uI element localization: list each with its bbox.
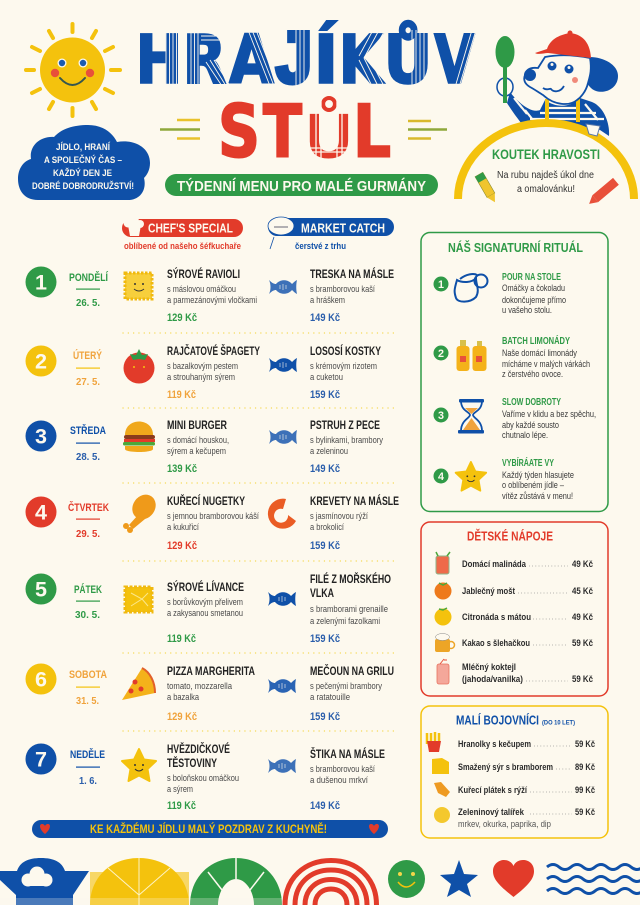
fish dish <box>310 268 394 324</box>
day badge 2 <box>26 346 56 376</box>
day badge 3: 3 <box>35 426 47 448</box>
step 2: mícháme v malých várkách <box>502 359 590 369</box>
day label <box>69 669 107 707</box>
day badge 5 <box>26 574 56 604</box>
drink item <box>462 638 593 649</box>
day badge 3 <box>26 420 56 452</box>
drink item: Kakao s šlehačkou <box>462 638 530 649</box>
title: Stůl: T <box>263 90 302 174</box>
icon: heart right <box>369 824 379 834</box>
dish: tomato, mozzarella <box>167 681 232 691</box>
icon: heart left <box>40 824 50 834</box>
title: Hrajíkův: J <box>276 18 312 98</box>
step 1 <box>434 272 566 315</box>
fish dish: 149 Kč <box>310 463 340 475</box>
day label: 31. 5. <box>76 695 99 707</box>
dish: 129 Kč <box>167 540 197 552</box>
day badge 4: 4 <box>35 502 47 524</box>
row: Pondělí <box>26 266 394 324</box>
step 1: Omáčky a čokoladu <box>502 283 565 293</box>
title: Hrajíkův: R <box>183 22 226 98</box>
cloud callout: KAŽDÝ DEN JE <box>53 167 112 179</box>
icon: lemon <box>434 608 452 626</box>
day label: 28. 5. <box>76 451 100 463</box>
title: Stůl: L <box>353 90 391 174</box>
kids item: Smažený sýr s bramborem <box>458 762 553 773</box>
day badge 6 <box>26 664 56 694</box>
bottom decor: rainbow <box>285 860 376 905</box>
drink item: Citronáda s mátou <box>462 612 531 623</box>
panel: Koutek hravosti: a omalovánku! <box>517 184 575 195</box>
title: Hrajíkův <box>136 18 474 98</box>
icon: raspberry drink <box>436 552 450 574</box>
column header: chef's special <box>122 216 243 251</box>
bottom fade strip <box>0 898 282 905</box>
dish: RAJČATOVÉ ŠPAGETY <box>167 345 260 358</box>
dish <box>167 495 259 552</box>
title: Hrajíkův: V <box>434 22 474 98</box>
day label: 1. 6. <box>79 775 97 787</box>
panel: Koutek hravosti: KOUTEK HRAVOSTI <box>492 147 600 162</box>
kids item: 99 Kč <box>575 785 595 796</box>
dish: a parmezánovými vločkami <box>167 295 257 305</box>
column header: chef's special: CHEF'S SPECIAL <box>148 222 233 236</box>
drink item <box>462 612 593 623</box>
column header: market catch <box>268 217 394 251</box>
shrimp dish: 159 Kč <box>310 540 340 552</box>
step 3: 3 <box>438 410 444 422</box>
fish dish: a hráškem <box>310 295 345 305</box>
day badge 1: 1 <box>35 272 47 294</box>
step 1: 1 <box>438 279 444 291</box>
cloud callout: DOBRÉ DOBRODRUŽSTVÍ! <box>32 180 134 192</box>
step 1: dokončujeme přímo <box>502 295 566 305</box>
icon: tomato <box>124 349 154 384</box>
step 4: Každý týden hlasujete <box>502 470 574 480</box>
icon: fish <box>268 759 296 773</box>
fish dish: PSTRUH Z PECE <box>310 420 380 432</box>
day badge 2: 2 <box>35 350 47 374</box>
drink item: (jahoda/vanilka) <box>462 674 523 685</box>
fish dish: a zelenými fazolkami <box>310 616 380 626</box>
icon: bottles <box>456 340 486 371</box>
icon: shrimp <box>268 499 296 529</box>
day label: SOBOTA <box>69 669 107 681</box>
icon: star <box>122 749 156 781</box>
step 3: SLOW DOBROTY <box>502 397 561 408</box>
banner: KE KAŽDÉMU JÍDLU MALÝ POZDRAV Z KUCHYNĚ! <box>90 823 327 836</box>
dish: KUŘECÍ NUGETKY <box>167 495 245 508</box>
drink item: 45 Kč <box>572 586 593 597</box>
step 4: 4 <box>438 471 445 483</box>
dish: SÝROVÉ RAVIOLI <box>167 268 240 281</box>
icon: star <box>456 462 486 491</box>
dish: s boloňskou omáčkou <box>167 773 239 783</box>
dish: PIZZA MARGHERITA <box>167 666 255 678</box>
fish dish: s bramborovou kaší <box>310 764 375 774</box>
step 4: o oblíbeném jídle – <box>502 480 564 490</box>
step 3 <box>434 397 596 440</box>
kids item: 59 Kč <box>575 807 595 818</box>
shrimp dish <box>310 495 399 552</box>
drink item <box>462 662 593 685</box>
day badge 5: 5 <box>35 578 47 602</box>
fish dish: s bramborami grenaille <box>310 604 388 614</box>
icon: dog with spoon <box>496 30 618 136</box>
step 1: POUR NA STOLE <box>502 272 561 283</box>
day label: ČTVRTEK <box>68 501 109 514</box>
icon: chicken strip <box>434 782 450 797</box>
fish dish: s krémovým rizotem <box>310 361 377 371</box>
step 3: aby každé sousto <box>502 420 559 430</box>
kids item: Hranolky s kečupem <box>458 739 531 750</box>
cloud callout <box>18 125 150 200</box>
dish: SÝROVÉ LÍVANCE <box>167 581 244 594</box>
icon: pizza <box>122 668 155 700</box>
day label <box>68 501 109 540</box>
icon: pancake <box>125 587 152 612</box>
title: Stůl: S <box>218 90 260 174</box>
icon: hourglass <box>458 399 484 434</box>
panel: kids menu <box>421 706 608 838</box>
kids item: Zeleninový talířek <box>458 807 525 818</box>
day badge 6: 6 <box>35 668 47 692</box>
day badge 1 <box>26 266 56 298</box>
bottom decor: heart <box>493 860 534 897</box>
day label: STŘEDA <box>70 424 106 437</box>
fish dish: 159 Kč <box>310 389 340 401</box>
cloud callout: A SPOLEČNÝ ČAS – <box>44 154 122 166</box>
step 4: VYBÍRÁATE VY <box>502 456 554 469</box>
day label: 27. 5. <box>76 376 100 388</box>
icon: fries <box>427 732 441 752</box>
dish: HVĚZDIČKOVÉ <box>167 743 230 756</box>
kids item <box>458 785 595 796</box>
title speed lines left <box>160 120 200 138</box>
bottom decor: smiley <box>388 860 425 898</box>
drink item <box>462 586 593 597</box>
column header: chef's special: oblíbené od našeho šéfkuchaře <box>124 241 241 251</box>
fish dish: LOSOSÍ KOSTKY <box>310 345 381 358</box>
step 4: vítěz zůstává v menu! <box>502 491 573 501</box>
step 3: Vaříme v klidu a bez spěchu, <box>502 409 596 419</box>
panel: signature ritual <box>421 232 608 512</box>
kids item: Kuřecí plátek s rýží <box>458 785 527 796</box>
panel: Koutek hravosti <box>458 123 634 207</box>
title: Stůl <box>218 90 391 174</box>
cloud callout: JÍDLO, HRANÍ <box>56 142 110 153</box>
icon: cloche <box>268 217 294 249</box>
step 3: chutnalo lépe. <box>502 430 548 440</box>
fish dish: 159 Kč <box>310 711 340 723</box>
title: Hrajíkův: H <box>136 22 182 98</box>
icon: yellow crayon <box>475 172 499 204</box>
title: Hrajíkův: Í <box>314 20 338 98</box>
icon: ravioli <box>125 273 152 299</box>
icon: fish <box>269 358 297 372</box>
fish dish: a ratatouille <box>310 692 350 702</box>
row: Sobota <box>26 664 394 723</box>
kids item: 89 Kč <box>575 762 595 773</box>
drink item: 49 Kč <box>572 559 593 570</box>
column header: market catch: čerstvé z trhu <box>295 241 346 251</box>
icon: fish <box>268 679 296 693</box>
row: Neděle <box>26 743 385 812</box>
fish dish: MEČOUN NA GRILU <box>310 665 394 678</box>
icon: milkshake <box>437 659 449 684</box>
dish: 129 Kč <box>167 711 197 723</box>
kids item: 59 Kč <box>575 739 595 750</box>
fish dish: VLKA <box>310 588 334 600</box>
icon: apple <box>434 582 452 600</box>
fish dish: TRESKA NA MÁSLE <box>310 268 394 281</box>
icon: vegetable plate <box>434 807 450 823</box>
bottom decor: yellow segment <box>90 858 189 905</box>
icon: fish <box>269 430 297 444</box>
day label <box>73 349 103 388</box>
step 2: 2 <box>438 348 444 360</box>
drink item: Domácí malináda <box>462 559 527 570</box>
dish: MINI BURGER <box>167 420 228 432</box>
fish dish <box>310 420 383 475</box>
drink item: Jablečný mošt <box>462 586 516 597</box>
bottom decor: blue hat <box>0 858 89 905</box>
dish: a kukuřicí <box>167 522 199 532</box>
fish dish: s pečenými brambory <box>310 681 382 691</box>
dish: s domácí houskou, <box>167 435 229 445</box>
dish: a strouhaným sýrem <box>167 372 235 382</box>
fish dish: a dušenou mrkví <box>310 775 368 785</box>
title: Hrajíkův: K <box>339 22 384 98</box>
title: Hrajíkův: Ů <box>384 22 432 98</box>
row: Pátek <box>26 573 391 645</box>
fish dish: a zeleninou <box>310 446 348 456</box>
icon: drumstick <box>123 490 160 533</box>
day label: 29. 5. <box>76 528 100 540</box>
step 1: u vašeho stolu. <box>502 305 552 315</box>
dish: s bazalkovým pestem <box>167 361 238 371</box>
bottom decor: star <box>440 860 478 897</box>
dish: 119 Kč <box>167 389 196 401</box>
dish: 139 Kč <box>167 463 197 475</box>
dish: s jemnou bramborovou káší <box>167 511 259 521</box>
day badge 4 <box>26 496 56 528</box>
row: Úterý <box>26 345 381 401</box>
row dividers <box>123 333 397 731</box>
day label <box>70 424 106 463</box>
icon: burger <box>123 422 155 452</box>
fish dish <box>310 748 385 812</box>
dish: a sýrem <box>167 784 193 794</box>
shrimp dish: a brokolicí <box>310 522 344 532</box>
day label: PONDĚLÍ <box>69 271 109 284</box>
day label <box>70 748 105 787</box>
panel: kids drinks <box>421 522 608 814</box>
drink item: Mléčný koktejl <box>462 662 516 673</box>
subtitle pill <box>165 174 438 196</box>
drink item: 59 Kč <box>572 674 593 685</box>
dish: 119 Kč <box>167 800 196 812</box>
title: Hrajíkův: A <box>230 22 274 98</box>
subtitle pill: TÝDENNÍ MENU PRO MALÉ GURMÁNY <box>177 177 426 195</box>
drink item: 49 Kč <box>572 612 593 623</box>
shrimp dish: s jasmínovou rýží <box>310 511 368 521</box>
day label: 30. 5. <box>75 609 100 621</box>
day badge 7: 7 <box>35 748 47 772</box>
icon: red crayon <box>586 178 619 207</box>
dish <box>167 581 244 645</box>
row: Středa <box>26 420 383 475</box>
panel: kids menu: (DO 10 LET) <box>542 720 575 726</box>
day label <box>74 583 102 621</box>
drink item <box>462 559 593 570</box>
icon: cocoa <box>435 634 454 652</box>
dish <box>167 743 239 812</box>
fish dish: s bylinkami, brambory <box>310 435 383 445</box>
fish dish: 149 Kč <box>310 800 340 812</box>
step 4 <box>434 456 574 501</box>
icon: sun <box>26 24 120 116</box>
icon: fish <box>268 592 296 606</box>
step 2: BATCH LIMONÁDY <box>502 334 570 347</box>
dish <box>167 268 257 324</box>
fish dish <box>310 573 391 645</box>
dish: sýrem a kečupem <box>167 446 226 456</box>
day label <box>69 271 109 309</box>
day label: PÁTEK <box>74 583 102 596</box>
kids item: mrkev, okurka, paprika, dip <box>458 819 551 829</box>
panel: signature ritual: NÁŠ SIGNATURNÍ RITUÁL <box>448 240 583 255</box>
panel: kids drinks: DĚTSKÉ NÁPOJE <box>467 528 553 544</box>
banner <box>32 820 388 838</box>
fish dish: s bramborovou kaší <box>310 284 375 294</box>
bottom decor: green arch <box>190 858 282 905</box>
bottom decor: waves <box>547 864 640 894</box>
drink item: 59 Kč <box>572 638 593 649</box>
row: Čtvrtek <box>26 490 399 552</box>
fish dish: FILÉ Z MOŘSKÉHO <box>310 573 391 586</box>
dish: 129 Kč <box>167 312 197 324</box>
day label: NEDĚLE <box>70 748 105 761</box>
day label: 26. 5. <box>76 297 100 309</box>
fish dish: ŠTIKA NA MÁSLE <box>310 748 385 761</box>
dish <box>167 345 260 401</box>
panel: kids menu: MALÍ BOJOVNÍCI <box>456 712 539 728</box>
step 2 <box>434 334 590 379</box>
icon: fish <box>269 280 297 294</box>
column header: market catch: MARKET CATCH <box>301 222 385 236</box>
kids item <box>458 739 595 750</box>
icon: fried cheese <box>432 758 449 774</box>
icon: dog paw <box>586 124 600 136</box>
icon: jug <box>455 274 488 302</box>
dish: TĚSTOVINY <box>167 757 217 770</box>
dish <box>167 420 229 475</box>
fish dish: a cuketou <box>310 372 343 382</box>
day badge 7 <box>26 744 56 774</box>
fish dish: 159 Kč <box>310 633 340 645</box>
dish: a zakysanou smetanou <box>167 608 243 618</box>
panel: Koutek hravosti: Na rubu najdeš úkol dne <box>497 170 594 181</box>
dish: s máslovou omáčkou <box>167 284 236 294</box>
dish: a bazalka <box>167 692 199 702</box>
dish <box>167 666 255 723</box>
icon: chef hat <box>124 216 144 236</box>
day label: ÚTERÝ <box>73 349 103 362</box>
fish dish <box>310 345 381 401</box>
shrimp dish: KREVETY NA MÁSLE <box>310 495 399 508</box>
title speed lines right <box>408 121 447 138</box>
dish: 119 Kč <box>167 633 196 645</box>
step 2: z čerstvého ovoce. <box>502 369 563 379</box>
title: Stůl: Ů <box>306 95 352 172</box>
fish dish: 149 Kč <box>310 312 340 324</box>
kids item <box>458 807 595 829</box>
step 2: Naše domácí limonády <box>502 348 577 358</box>
dish: s borůvkovým přelivem <box>167 597 243 607</box>
fish dish <box>310 665 394 723</box>
